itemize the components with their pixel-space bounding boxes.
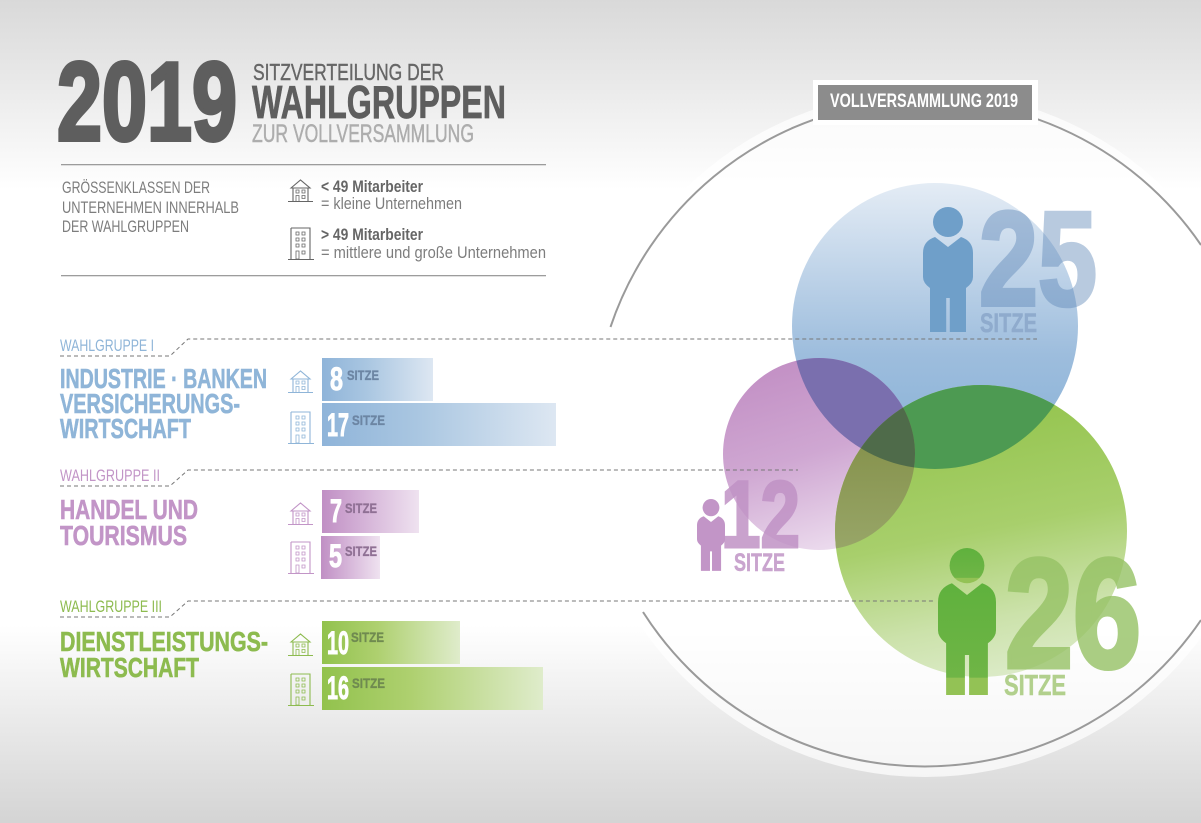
bar 16: 16 (327, 670, 349, 706)
bar 10: 10 (327, 625, 349, 661)
bar 10: SITZE (351, 629, 384, 645)
label I: WAHLGRUPPE I (60, 336, 154, 355)
overlap: purple and green (835, 408, 915, 548)
overlap: blue and purple (796, 358, 903, 448)
legend: small companies: = kleine Unternehmen (321, 195, 462, 213)
heading II: HANDEL UND (60, 494, 198, 525)
legend: large companies: > 49 Mitarbeiter (321, 226, 423, 244)
bar 8: SITZE (347, 367, 379, 383)
heading II (60, 494, 198, 551)
panel: Wahlgruppe I (60, 336, 1037, 446)
panel: Wahlgruppe III (60, 597, 935, 710)
bar 17 (322, 403, 556, 446)
circle: Wahlgruppe II (723, 358, 915, 550)
legend: large companies (321, 226, 546, 262)
person: Wahlgruppe II (697, 499, 725, 571)
heading III (60, 626, 268, 683)
panel: Wahlgruppe II (60, 466, 798, 579)
heading I (60, 363, 267, 444)
number 25: 25 (979, 185, 1097, 334)
bar 17: SITZE (352, 412, 385, 428)
person: Wahlgruppe III (938, 548, 996, 695)
legend: small companies: < 49 Mitarbeiter (321, 178, 423, 196)
title (252, 59, 506, 148)
sitze 12: SITZE (734, 549, 785, 577)
circle: Wahlgruppe III (835, 385, 1127, 677)
label: Vollversammlung 2019 (813, 80, 1038, 125)
connector I (60, 339, 1037, 356)
bar 5 (321, 536, 380, 579)
legend heading: UNTERNEHMEN INNERHALB (62, 198, 239, 217)
title: SITZVERTEILUNG DER (253, 59, 444, 85)
icon small II (288, 503, 313, 524)
bar 17: 17 (327, 407, 349, 443)
bar 7: SITZE (345, 500, 377, 516)
bar 8: 8 (330, 361, 343, 397)
overlap: blue and green (861, 385, 1054, 469)
legend: small companies (321, 178, 462, 213)
circle: Wahlgruppe I (792, 183, 1078, 469)
icon: large company (288, 228, 314, 260)
bar 5: 5 (329, 538, 342, 574)
overlap: all three (860, 408, 915, 468)
bar 5: SITZE (345, 543, 377, 559)
heading I: VERSICHERUNGS- (60, 388, 240, 419)
legend heading (62, 178, 239, 236)
icon tall III (288, 674, 314, 706)
bar 16: SITZE (352, 675, 385, 691)
white halo circle (582, 91, 1201, 777)
bar 7: 7 (330, 493, 342, 529)
person: Wahlgruppe I (923, 207, 973, 332)
label III: WAHLGRUPPE III (60, 597, 162, 616)
title year: 2019 (57, 40, 237, 164)
title: ZUR VOLLVERSAMMLUNG (252, 120, 474, 148)
heading III: WIRTSCHAFT (60, 652, 199, 683)
connector III (60, 601, 935, 617)
heading I: INDUSTRIE · BANKEN (60, 363, 267, 394)
sitze 25: SITZE (980, 308, 1037, 338)
title: WAHLGRUPPEN (252, 76, 506, 128)
icon: small company (288, 180, 313, 202)
assembly ring (610, 100, 1201, 766)
bar 16 (322, 667, 543, 710)
number 26: 26 (1005, 527, 1141, 700)
legend bottom rule (61, 275, 546, 276)
icon tall II (288, 542, 314, 574)
icon small I (288, 371, 313, 392)
legend: large companies: = mittlere und große Unternehmen (321, 244, 546, 262)
number 12: 12 (721, 462, 800, 568)
legend heading: GRÖSSENKLASSEN DER (62, 178, 210, 197)
legend top rule (61, 164, 546, 165)
heading I: WIRTSCHAFT (60, 413, 191, 444)
heading III: DIENSTLEISTUNGS- (60, 626, 268, 657)
bar 7 (322, 490, 419, 533)
label: Vollversammlung 2019: VOLLVERSAMMLUNG 2019 (830, 91, 1018, 112)
sitze 26: SITZE (1004, 670, 1066, 702)
bar 8 (322, 358, 433, 401)
label II: WAHLGRUPPE II (60, 466, 160, 485)
icon small III (288, 634, 313, 656)
bar 10 (322, 621, 460, 664)
legend heading: DER WAHLGRUPPEN (62, 217, 189, 236)
heading II: TOURISMUS (60, 520, 187, 551)
connector II (60, 470, 798, 486)
icon tall I (288, 412, 314, 444)
